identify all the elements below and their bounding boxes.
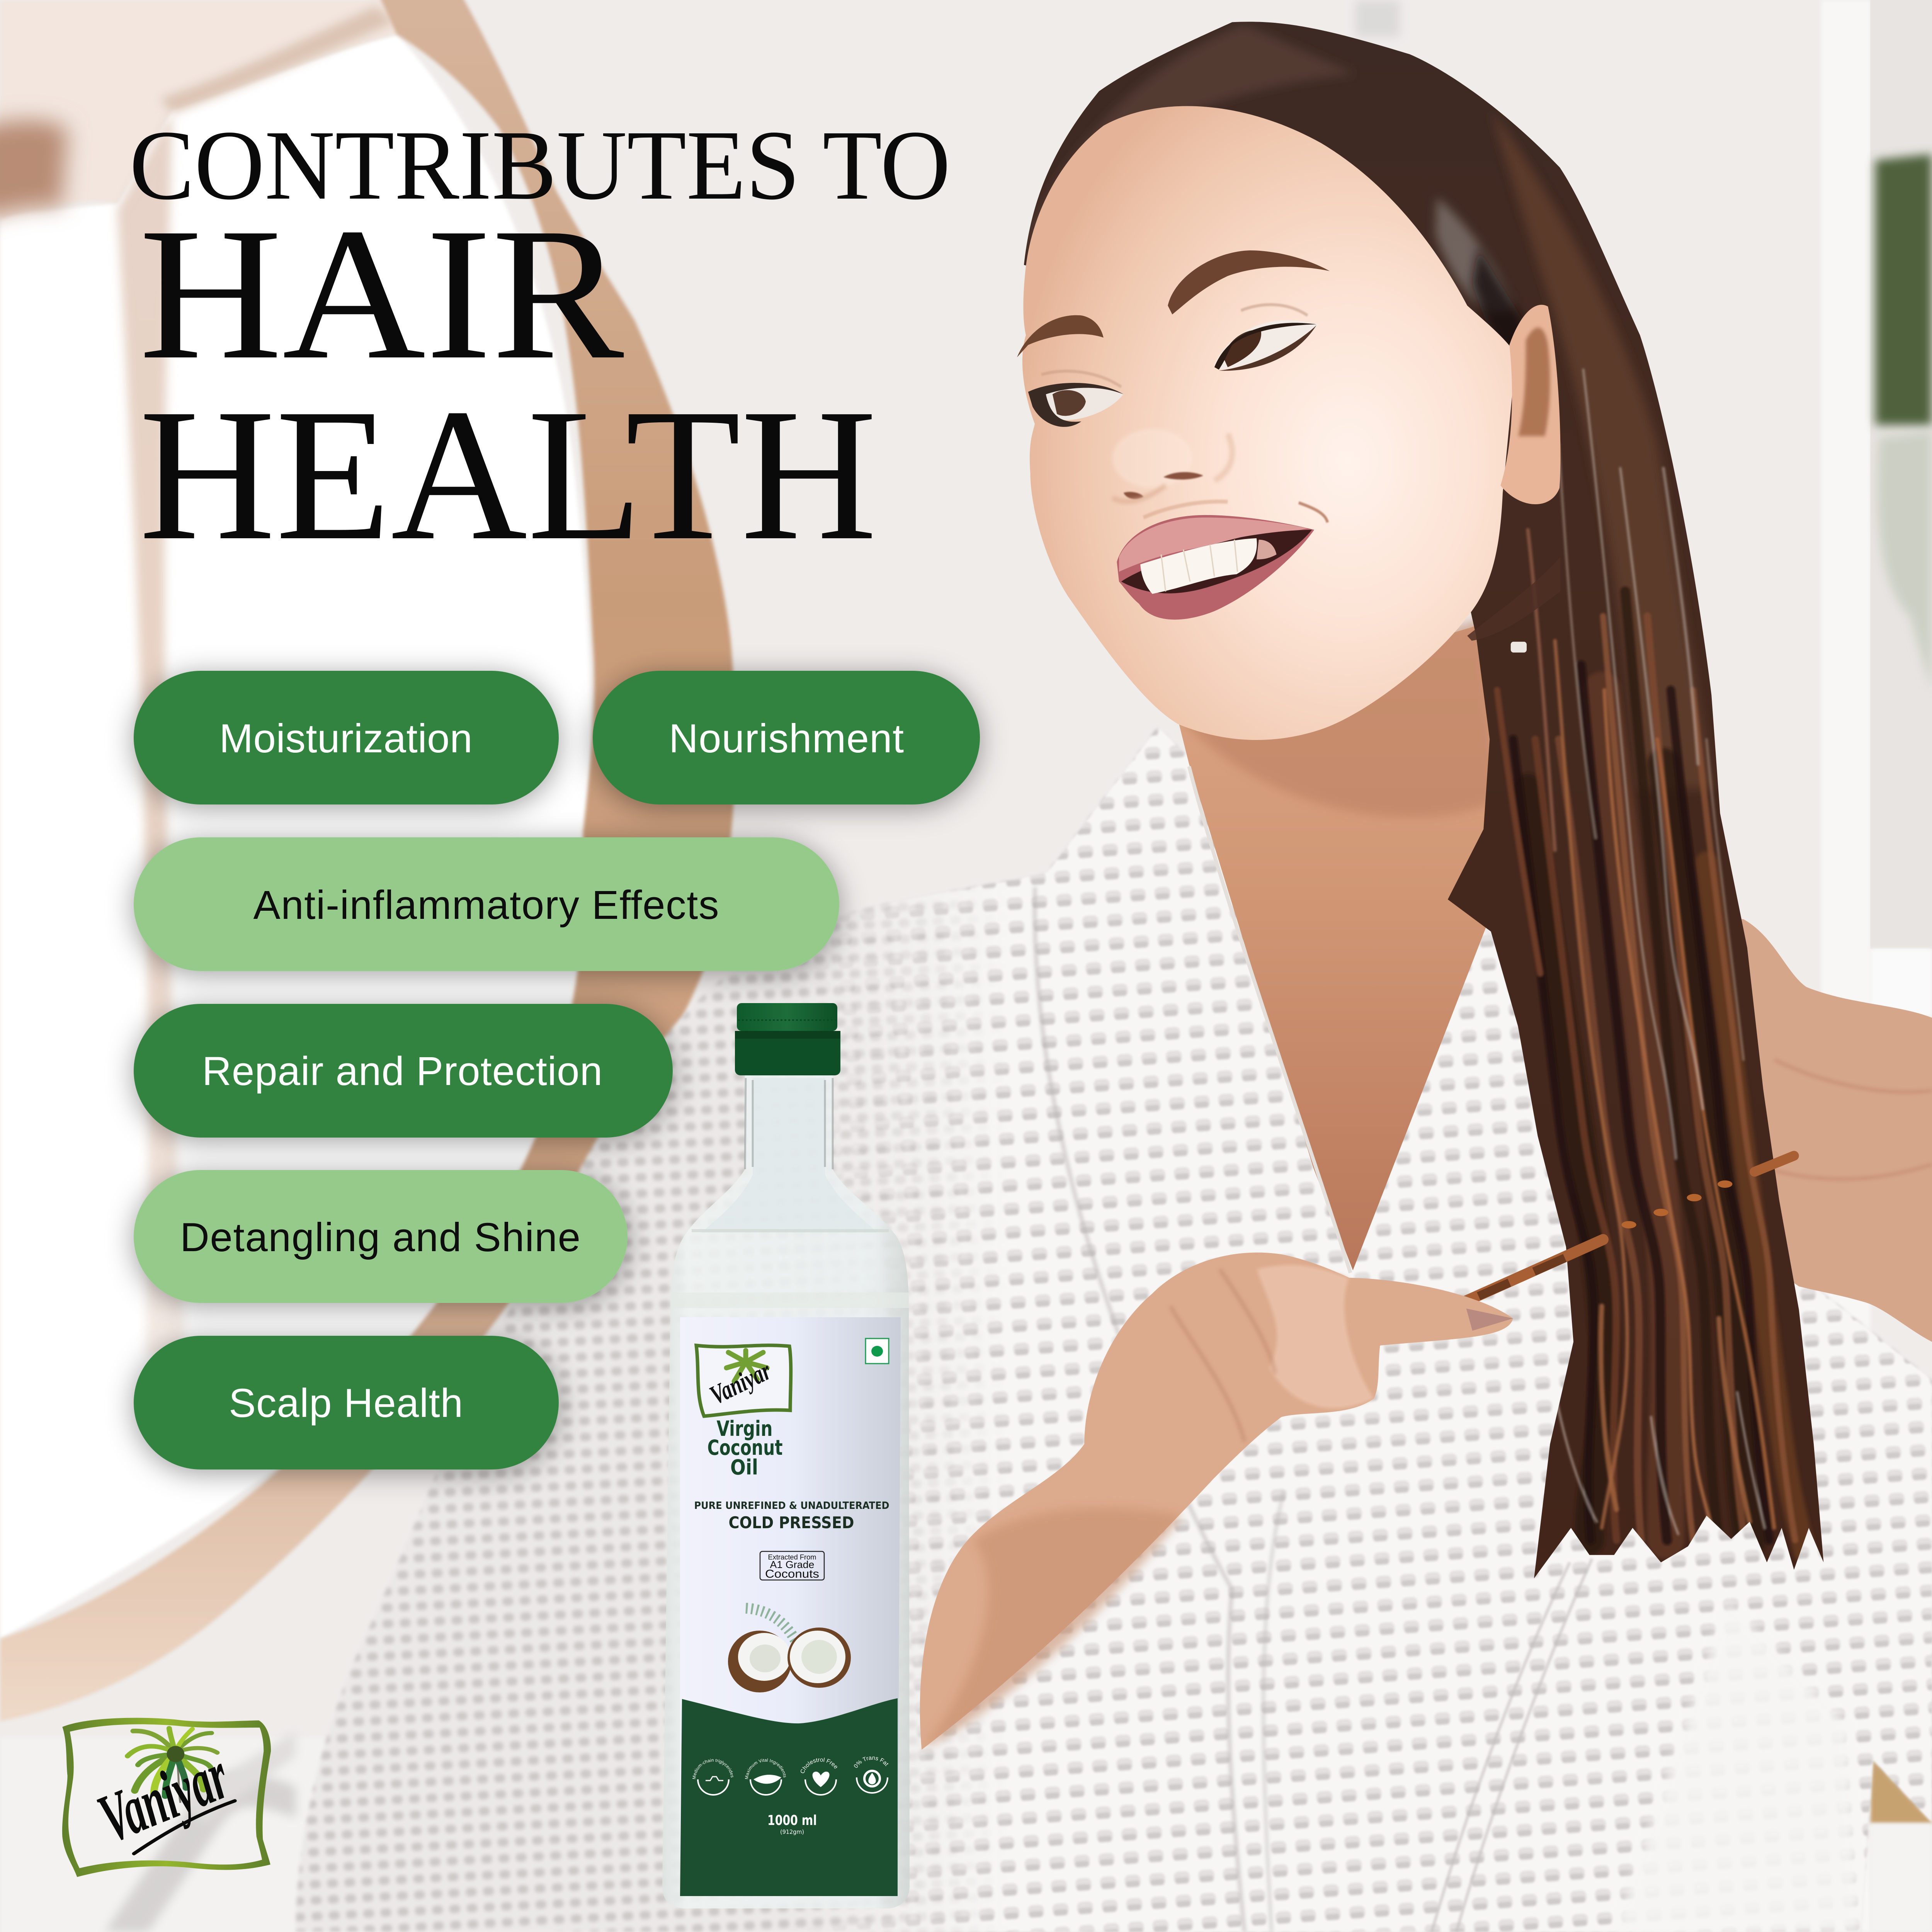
- hair strands: [1497, 370, 1795, 1540]
- pill: moisturization: Moisturization: [219, 716, 472, 761]
- pill: scalp health: Scalp Health: [229, 1381, 463, 1426]
- neck highlights: [701, 1078, 877, 1233]
- neck and chest skin: [1177, 616, 1509, 1270]
- pill: nourishment: Nourishment: [669, 716, 904, 761]
- pill: anti-inflammatory effects: [134, 837, 839, 971]
- pill: repair and protection: [134, 1004, 673, 1138]
- small logo: Vaniyar: [705, 1356, 776, 1410]
- right wall details: [1821, 0, 1871, 1932]
- eye right: [1214, 320, 1319, 370]
- glass body: [662, 1074, 910, 1908]
- palm tree: [128, 1728, 217, 1803]
- volume: (912gm): [780, 1828, 804, 1835]
- label: [680, 1317, 901, 1896]
- label green wave: [680, 1698, 898, 1896]
- lower-left white wall and faucet: [0, 1737, 370, 1932]
- product name: Coconut: [707, 1435, 783, 1460]
- volume: [767, 1813, 817, 1835]
- eyebrows: [1168, 250, 1330, 315]
- flyaway hair by cheek: [1467, 557, 1560, 641]
- pill: anti-inflammatory effects: Anti-inflammatory Effects: [253, 883, 719, 928]
- pill: scalp health: [134, 1336, 559, 1469]
- title: [129, 110, 951, 579]
- veg mark: [866, 1338, 889, 1364]
- robe lapel folds: [1035, 766, 1592, 1932]
- nose: [1112, 429, 1192, 488]
- brand logo: [62, 1718, 271, 1877]
- top-left pale wall and band: [0, 0, 406, 219]
- bottom-right blurred robe area: [1614, 1602, 1861, 1932]
- claim badges: 0% Trans Fat: [852, 1755, 890, 1769]
- a1 grade badge: Extracted From: [768, 1553, 816, 1561]
- claim badges: Medium-chain triglycerides: [692, 1758, 735, 1779]
- front hand and forearm: [920, 1253, 1513, 1750]
- mouth: [1117, 515, 1314, 620]
- product name: Virgin: [716, 1417, 773, 1441]
- hair cap shading: [1010, 25, 1355, 271]
- logo frame and palm: [62, 1718, 271, 1877]
- eye left: [1046, 385, 1124, 420]
- heading line: contributes to: CONTRIBUTES TO: [129, 110, 951, 220]
- face close-up: [1017, 106, 1560, 740]
- claim badges: [692, 1755, 890, 1795]
- mirror interior: [0, 34, 591, 1639]
- product name: Oil: [730, 1455, 758, 1480]
- comb: [1375, 1156, 1794, 1342]
- broad hair tones: [1528, 690, 1805, 1553]
- product bottle: [662, 1003, 910, 1908]
- volume: 1000 ml: [767, 1813, 817, 1828]
- heading line: hair: HAIR: [139, 189, 625, 398]
- pill: detangling and shine: [134, 1170, 628, 1303]
- hair: [1010, 0, 1873, 1602]
- pill: nourishment: [593, 671, 980, 804]
- logo wordmark: Vaniyar: [88, 1736, 239, 1857]
- pill: detangling and shine: Detangling and Shine: [180, 1215, 580, 1260]
- claim badges: Maximum Vital Ingredients: [745, 1758, 787, 1779]
- benefit pills: [134, 671, 980, 1469]
- ear: [1500, 305, 1560, 504]
- cold pressed: COLD PRESSED: [729, 1513, 854, 1532]
- pill: repair and protection: Repair and Protection: [202, 1049, 602, 1094]
- a1 grade badge: [760, 1551, 824, 1580]
- bathrobe body: [296, 727, 1932, 1932]
- mirror inner left strip: [117, 111, 185, 1355]
- pill: moisturization: [134, 671, 559, 804]
- a1 grade badge: Coconuts: [765, 1568, 819, 1580]
- coconut illustration: [728, 1608, 851, 1692]
- a1 grade badge: A1 Grade: [770, 1559, 815, 1570]
- back hand and forearm: [1719, 918, 1932, 1342]
- product name: [707, 1417, 783, 1480]
- tagline: PURE UNREFINED & UNADULTERATED: [694, 1500, 889, 1512]
- cap: [735, 1003, 840, 1075]
- heading line: health: HEALTH: [139, 369, 877, 579]
- face: [1022, 106, 1516, 740]
- mirror wooden frame: [0, 0, 735, 1721]
- claim badges: Cholestrol Free: [799, 1757, 839, 1775]
